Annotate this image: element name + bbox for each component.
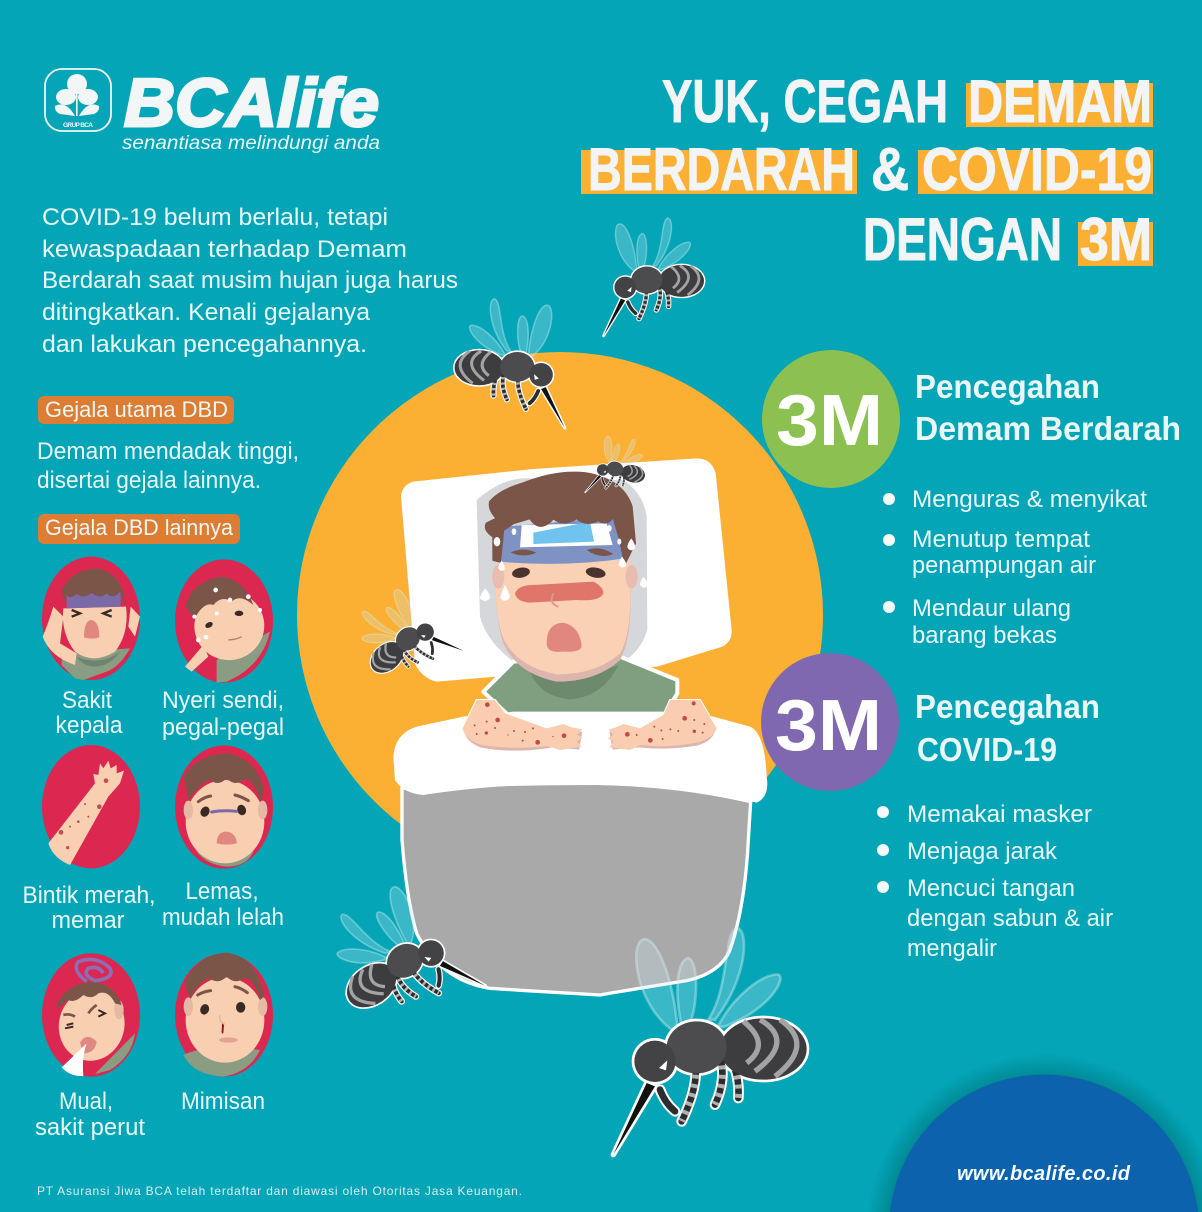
sick man in bed xyxy=(393,460,767,995)
symptom icons, lower row xyxy=(42,953,273,1077)
logo tagline: senantiasa melindungi anda xyxy=(122,133,380,154)
title: COVID-19 xyxy=(922,136,1152,203)
main symptom text: disertai gejala lainnya. xyxy=(37,467,261,494)
3M circle: dengue prevention: 3M xyxy=(776,381,883,461)
list: dengue prevention: barang bekas xyxy=(912,622,1057,649)
mosquito: on hair xyxy=(585,431,653,505)
intro text: dan lakukan pencegahannya. xyxy=(42,331,367,358)
symptom labels: memar xyxy=(52,907,125,934)
mosquito: top right xyxy=(604,218,704,336)
main symptom text xyxy=(37,438,299,494)
intro text: kewaspadaan terhadap Demam xyxy=(42,236,407,263)
symptom labels xyxy=(22,687,284,1141)
title: DEMAM xyxy=(968,68,1152,135)
title: BERDARAH xyxy=(588,136,855,203)
intro text xyxy=(42,204,458,358)
title highlights xyxy=(581,83,1153,266)
heading: Pencegahan COVID-19 xyxy=(915,688,1100,768)
symptom labels: kepala xyxy=(56,712,123,739)
face xyxy=(496,560,631,682)
head shadow xyxy=(477,478,647,667)
arms with red spots xyxy=(463,700,717,752)
mosquito: large bottom xyxy=(613,928,807,1155)
icon: nosebleed xyxy=(175,953,273,1077)
symptom labels: Lemas, xyxy=(186,878,258,905)
title: 3M xyxy=(1080,206,1152,273)
symptom labels: mudah lelah xyxy=(162,904,284,931)
icon: joint pain xyxy=(175,559,273,683)
mosquito: left of pillow xyxy=(340,578,464,703)
pillow xyxy=(403,460,730,680)
3M circle: COVID-19 prevention xyxy=(761,653,899,791)
title: DENGAN xyxy=(863,206,1062,273)
list: COVID-19 prevention xyxy=(877,801,1113,962)
icon: Grup BCA emblem: GRUP BCA xyxy=(63,122,93,129)
symptom labels: Mimisan xyxy=(181,1088,265,1115)
title: YUK, CEGAH xyxy=(662,68,948,135)
3M circle: COVID-19 prevention: 3M xyxy=(775,686,882,766)
intro text: Berdarah saat musim hujan juga harus xyxy=(42,267,458,294)
hair xyxy=(486,473,635,563)
website corner xyxy=(866,1054,1202,1212)
symptom labels: Bintik merah, xyxy=(22,882,156,909)
list: dengue prevention: Menutup tempat xyxy=(912,526,1090,553)
heading: Pencegahan Demam Berdarah: Demam Berdarah xyxy=(915,410,1181,447)
symptom icons, upper rows xyxy=(42,557,273,869)
icon: Grup BCA emblem xyxy=(45,69,111,131)
list: COVID-19 prevention: dengan sabun & air xyxy=(907,905,1113,932)
3M circle: dengue prevention xyxy=(762,350,900,488)
logo: BCA life xyxy=(45,65,380,154)
eyes xyxy=(511,566,531,579)
icon: fatigue xyxy=(175,745,273,869)
mosquito: above circle xyxy=(455,299,565,428)
list: COVID-19 prevention: Memakai masker xyxy=(907,801,1092,828)
intro text: COVID-19 belum berlalu, tetapi xyxy=(42,204,388,231)
list: dengue prevention xyxy=(883,486,1147,649)
symptom labels: sakit perut xyxy=(35,1114,145,1141)
tag: Gejala utama DBD: Gejala utama DBD xyxy=(45,397,228,422)
heading: Pencegahan COVID-19: Pencegahan xyxy=(915,688,1100,725)
list: dengue prevention: penampungan air xyxy=(912,552,1096,579)
symptom labels: Nyeri sendi, xyxy=(162,687,284,714)
logo wordmark: BCAlife xyxy=(124,65,379,141)
mouth xyxy=(547,623,582,652)
website url: www.bcalife.co.id xyxy=(957,1163,1131,1185)
symptom labels: pegal-pegal xyxy=(162,714,284,741)
list: dengue prevention: Mendaur ulang xyxy=(912,595,1071,622)
icon: nausea xyxy=(42,953,140,1077)
list: COVID-19 prevention: mengalir xyxy=(907,935,997,962)
mosquito: lower left xyxy=(307,871,485,1054)
flushed cheeks xyxy=(515,582,603,603)
symptom labels: Sakit xyxy=(62,687,112,714)
blanket xyxy=(393,712,767,803)
orange circle xyxy=(297,352,823,878)
list: COVID-19 prevention: Menjaga jarak xyxy=(907,838,1058,865)
intro text: ditingkatkan. Kenali gejalanya xyxy=(42,299,370,326)
list: dengue prevention: Menguras & menyikat xyxy=(912,486,1147,513)
list: COVID-19 prevention: Mencuci tangan xyxy=(907,875,1075,902)
title xyxy=(581,68,1153,273)
main symptom text: Demam mendadak tinggi, xyxy=(37,438,299,465)
heading: Pencegahan Demam Berdarah xyxy=(915,368,1181,447)
sweat drops xyxy=(480,525,648,601)
symptom labels: Mual, xyxy=(59,1088,113,1115)
footer disclaimer: PT Asuransi Jiwa BCA telah terdaftar dan diawasi oleh Otoritas Jasa Keuangan. xyxy=(37,1184,522,1198)
heading: Pencegahan COVID-19: COVID-19 xyxy=(917,731,1057,768)
icon: red spots arm xyxy=(42,745,140,868)
heading: Pencegahan Demam Berdarah: Pencegahan xyxy=(915,368,1100,405)
man and pillow xyxy=(403,460,730,717)
bed: grey base xyxy=(402,783,751,995)
shirt xyxy=(483,657,677,717)
icon: headache xyxy=(42,557,140,680)
tag: Gejala DBD lainnya: Gejala DBD lainnya xyxy=(45,515,234,540)
title: & xyxy=(871,136,909,203)
